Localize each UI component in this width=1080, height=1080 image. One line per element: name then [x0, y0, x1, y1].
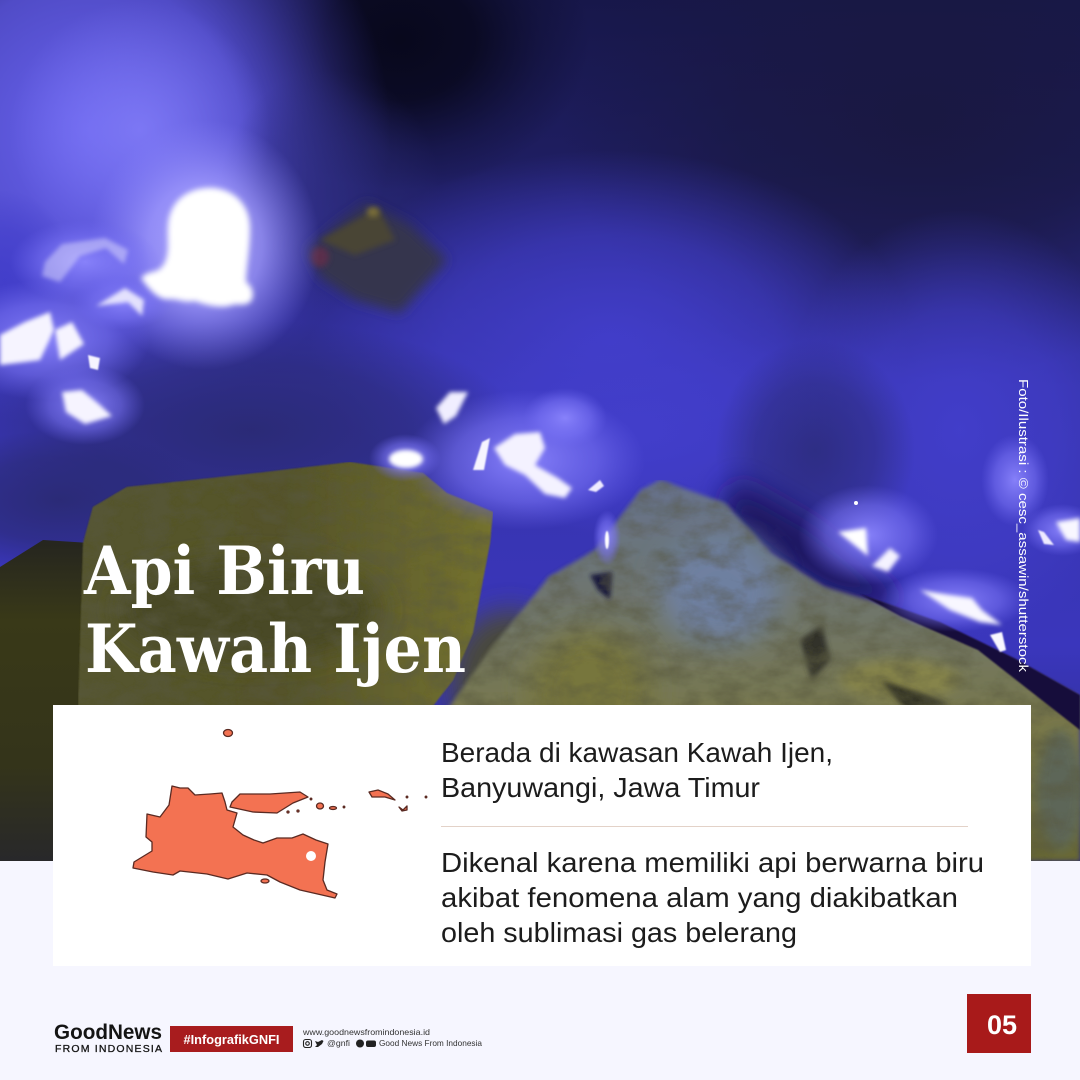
social links — [302, 1027, 482, 1048]
flame: left white patches — [0, 238, 144, 424]
map: East Java — [133, 730, 427, 898]
title: Kawah Ijen — [85, 610, 466, 688]
rock: right sulfur slope — [440, 480, 1080, 861]
map marker: Kawah Ijen — [306, 851, 316, 861]
flames: center cluster — [369, 388, 645, 566]
text: location: Banyuwangi, Jawa Timur — [441, 772, 760, 803]
title — [83, 532, 466, 688]
panel: location info — [53, 705, 1031, 966]
text: description: oleh sublimasi gas belerang — [441, 917, 797, 948]
text: location: Berada di kawasan Kawah Ijen, — [441, 737, 833, 768]
hashtag tag — [170, 1026, 293, 1052]
icon: youtube — [366, 1040, 376, 1047]
hashtag tag: #InfografikGNFI — [184, 1033, 280, 1047]
flame: large white blob — [141, 188, 253, 307]
icon: instagram — [304, 1040, 312, 1048]
logo: GoodNews from Indonesia — [54, 1021, 162, 1055]
text: description: Dikenal karena memiliki api berwarna biru — [441, 847, 984, 878]
rock outcrop upper — [307, 203, 447, 313]
flames: right cluster — [798, 434, 1080, 652]
text: location — [441, 737, 833, 803]
background photo: blue fire crater — [0, 0, 1080, 861]
icon: twitter — [315, 1040, 324, 1047]
rock: large foreground boulder — [78, 462, 493, 710]
social links: @gnfi — [327, 1038, 350, 1048]
social links: Good News From Indonesia — [379, 1038, 482, 1048]
social links: www.goodnewsfromindonesia.id — [302, 1027, 430, 1037]
rock: dark ridge at right — [860, 594, 1080, 730]
page number: 05 — [987, 1010, 1017, 1040]
text: description — [441, 847, 984, 948]
logo: GoodNews from Indonesia: GoodNews — [54, 1021, 162, 1044]
rock: dark valley — [720, 480, 905, 610]
rock: left slope — [0, 540, 84, 861]
rock: haze behind boulder — [436, 589, 531, 705]
page number — [967, 994, 1031, 1053]
flames: left cluster glow — [0, 120, 320, 445]
title: Api Biru — [83, 532, 365, 610]
logo: GoodNews from Indonesia: FROM INDONESIA — [55, 1043, 162, 1055]
photo credit: Foto/Ilustrasi : © cesc_assawin/shutterstock — [1016, 379, 1031, 673]
text: description: akibat fenomena alam yang diakibatkan — [441, 882, 958, 913]
icon: facebook — [356, 1040, 364, 1048]
